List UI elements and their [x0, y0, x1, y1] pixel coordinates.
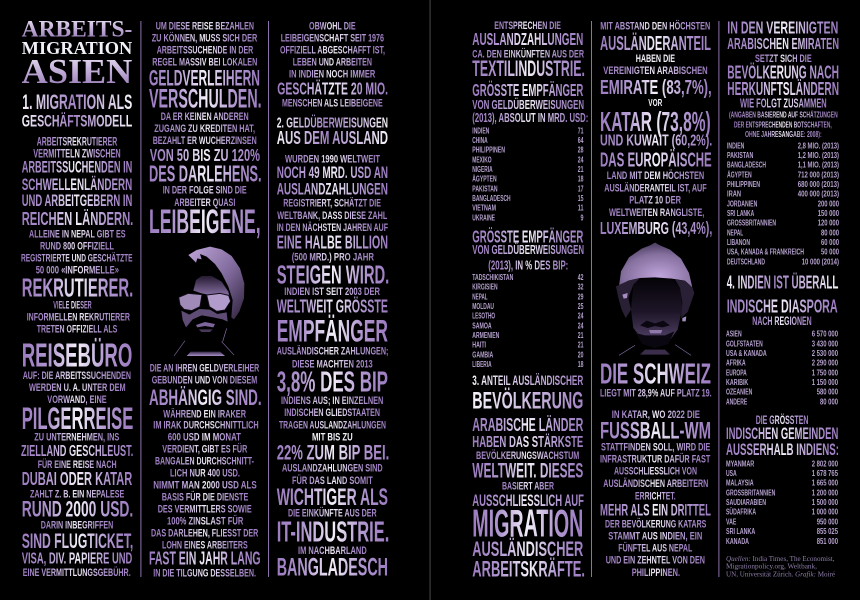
page fold — [429, 0, 431, 600]
table: empfänger in prozent des bip: 25 — [578, 302, 584, 311]
table: empfänger absolut: INDIEN — [472, 126, 489, 135]
text block: abhängig: FAST EIN JAHR LANG — [149, 548, 261, 568]
table: grösste gemeinden: MYANMAR — [726, 459, 754, 468]
table: empfänger absolut: PAKISTAN — [472, 184, 498, 193]
text block: verschulden: ARBEITSSUCHENDE IN DER — [157, 45, 253, 57]
table: empfänger in prozent des bip: VON GELDÜBERWEISUNGEN — [472, 242, 584, 257]
text block: auslandzahlungen: 3,8% DES BIP — [277, 367, 388, 399]
table: empfänger absolut: 24 — [578, 155, 584, 164]
table: emirate nach herkunftsländern: 1,2 MIO. (2013) — [798, 151, 839, 160]
table: emirate nach herkunftsländern: 80 000 — [821, 228, 839, 237]
table: emirate nach herkunftsländern: USA, KANADA & FRANKREICH — [727, 248, 804, 257]
table: emirate nach herkunftsländern: OHNE JAHRESANGABE: 2008): — [745, 130, 822, 139]
text block: reisebüro: ZIELLAND GESCHLEUST. — [21, 443, 133, 460]
table: empfänger in prozent des bip: 20 — [578, 350, 584, 359]
text block: rekrutierer: ARBEITSSUCHENDEN IN — [22, 158, 132, 177]
text block: reisebüro: DUBAI ODER KATAR — [22, 469, 133, 490]
text block: auslandzahlungen: FÜR DAS LAND SOMIT — [292, 474, 373, 487]
table: indische diaspora: USA & KANADA — [726, 349, 767, 358]
table: emirate nach herkunftsländern — [727, 17, 839, 266]
heading: section 2 — [277, 114, 388, 149]
table: grösste gemeinden: 1 500 000 — [812, 498, 838, 507]
text block: ausländeranteil: HABEN DIE — [636, 53, 675, 65]
table: grösste gemeinden: SAUDIARABIEN — [726, 498, 766, 507]
table: empfänger absolut: NIGERIA — [472, 165, 493, 174]
text block: auslandzahlungen: WICHTIGER ALS — [277, 484, 388, 511]
text block: abhängig: DAS DARLEHEN, FLIESST DER — [151, 528, 258, 540]
text block: verschulden: DA ER KEINEN ANDEREN — [161, 111, 249, 123]
table: indische diaspora: 6 570 000 — [812, 330, 838, 339]
text block: arabische länder: MIGRATION — [472, 503, 583, 546]
heading: section 2: 2. GELDÜBERWEISUNGEN — [277, 114, 388, 131]
table: empfänger in prozent des bip — [472, 227, 584, 369]
text block: reisebüro: FÜR EINE REISE NACH — [38, 458, 117, 471]
text block: arabische länder: BASIERT ABER — [502, 480, 554, 492]
table: emirate nach herkunftsländern: 120 000 — [818, 219, 839, 228]
text block: verschulden: VERSCHULDEN. — [149, 84, 262, 114]
text block: rekrutierer: REKRUTIERER. — [22, 272, 133, 302]
text block: arabische länder: ARABISCHE LÄNDER — [472, 414, 583, 435]
text block: ausländeranteil: EMIRATE (83,7%), — [600, 77, 712, 99]
table: empfänger absolut: CHINA — [472, 136, 488, 145]
text block: verschulden: GELDVERLEIHERN — [149, 66, 260, 91]
table: indische diaspora: 2 530 000 — [812, 349, 838, 358]
table: empfänger in prozent des bip: KIRGISIEN — [472, 283, 498, 292]
table: empfänger absolut: 15 — [578, 194, 584, 203]
text block: auslandzahlungen: TRAGEN AUSLANDZAHLUNGEN — [279, 419, 386, 431]
table: emirate nach herkunftsländern: SETZT SICH DIE — [755, 53, 812, 65]
text block: arabische länder: ARBEITSKRÄFTE. — [472, 557, 585, 582]
text block: auslandzahlungen: IM NACHBARLAND — [298, 545, 367, 557]
table: emirate nach herkunftsländern: JORDANIEN — [727, 199, 757, 208]
text block: verschulden: ZUGANG ZU KREDITEN HAT, — [154, 123, 255, 135]
text block: reisebüro: REISEBÜRO — [22, 338, 132, 375]
table: grösste gemeinden: SÜDAFRIKA — [726, 508, 756, 517]
text block: abhängig: DES VERMITTLERS SOWIE — [158, 504, 252, 516]
table: empfänger absolut: 17 — [578, 184, 584, 193]
text block: verschulden: REGEL MASSIV BEI LOKALEN — [152, 57, 257, 69]
table: grösste gemeinden: 1 665 000 — [812, 479, 838, 488]
text block: ausländeranteil: AUSLÄNDERANTEIL IST, AUF — [604, 181, 707, 194]
table: grösste gemeinden: 851 000 — [817, 537, 838, 546]
text block: fussball-wm: STATTFINDEN SOLL, WIRD DIE — [601, 442, 710, 454]
table: empfänger absolut: VON GELDÜBERWEISUNGEN — [472, 97, 584, 112]
text block: abhängig: LOHN EINES ARBEITERS — [162, 540, 248, 552]
table: indische diaspora: OZEANIEN — [726, 388, 752, 397]
text block: verschulden: VON 50 BIS ZU 120% — [150, 145, 260, 165]
text block: arabische länder: HABEN DAS STÄRKSTE — [472, 433, 583, 451]
table: emirate nach herkunftsländern: ÄGYPTEN — [727, 170, 752, 179]
text block: auslandzahlungen: DIESE MACHTEN 2013 — [292, 358, 373, 370]
text block: abhängig — [149, 362, 262, 580]
text block: rekrutierer: REGISTRIERTE UND GESCHÄTZTE — [21, 252, 133, 264]
text block: verschulden: DES DARLEHENS. — [149, 161, 262, 187]
table: empfänger absolut: 18 — [578, 175, 584, 184]
table: grösste gemeinden: 1 678 765 — [812, 469, 838, 478]
text block: reisebüro: INFORMELLEN REKRUTIERER — [27, 312, 130, 324]
text block: auslandzahlungen: 22% ZUM BIP BEI. — [277, 441, 389, 464]
table: indische diaspora: 2 290 000 — [812, 359, 838, 368]
text block: auslandzahlungen: AUSLÄNDISCHER ZAHLUNGEN; — [277, 345, 388, 358]
table: grösste gemeinden: KANADA — [726, 537, 749, 546]
table: empfänger in prozent des bip: 24 — [578, 312, 584, 321]
text block: verschulden: ARBEITER QUASI — [174, 197, 235, 209]
text block: schweiz — [600, 358, 712, 400]
table: indische diaspora: EUROPA — [726, 368, 747, 377]
text block: verschulden: LEIBEIGENE, — [149, 203, 261, 241]
panel: column 6 — [726, 17, 839, 579]
text block: ausländeranteil: MIT ABSTAND DEN HÖCHSTEN — [600, 19, 710, 32]
table: emirate nach herkunftsländern: DEUTSCHLAND — [727, 257, 765, 266]
text block: reisebüro: PILGERREISE — [22, 401, 133, 436]
table: empfänger in prozent des bip: TADSCHIKISTAN — [472, 273, 513, 282]
text block: arabische länder — [472, 414, 585, 582]
panel: column 1 — [21, 17, 133, 579]
table: empfänger in prozent des bip: 42 — [578, 273, 584, 282]
illustration: man with turban and sunglasses — [174, 247, 244, 356]
text block: textilindustrie: TEXTILINDUSTRIE. — [472, 56, 585, 81]
text block: leibeigenschaft: OBWOHL DIE — [309, 20, 356, 32]
text block: reisebüro: RUND 2000 USD. — [22, 497, 133, 522]
text block: arabische länder: BEVÖLKERUNGSWACHSTUM — [476, 449, 579, 462]
text block: reisebüro — [21, 299, 133, 579]
table: grösste gemeinden: GROSSBRITANNIEN — [726, 488, 775, 497]
text block: auslandzahlungen: STEIGEN WIRD. — [277, 259, 389, 289]
text block: auslandzahlungen: (500 MRD.) PRO JAHR — [292, 252, 374, 264]
text block: fussball-wm: FUSSBALL-WM — [600, 417, 711, 444]
panel: column 2 — [149, 20, 262, 580]
table: emirate nach herkunftsländern: 10 000 (2014) — [802, 257, 839, 266]
text block: auslandzahlungen: NOCH 49 MRD. USD AN — [277, 164, 388, 182]
text block: auslandzahlungen: EMPFÄNGER — [277, 314, 388, 349]
table: emirate nach herkunftsländern: LIBANON — [727, 238, 750, 247]
table: empfänger absolut: 11 — [578, 204, 584, 213]
table: empfänger in prozent des bip: 18 — [578, 360, 584, 369]
table: indische diaspora: 580 000 — [817, 388, 838, 397]
source credits: Quellen: India Times, The Economist, — [726, 555, 835, 563]
text block: abhängig: VERDIENT, GIBT ES FÜR — [162, 443, 247, 456]
table: grösste gemeinden: 950 000 — [817, 517, 838, 526]
text block: textilindustrie: ENTSPRECHEN DIE — [494, 20, 561, 32]
table: emirate nach herkunftsländern: INDIEN — [727, 141, 744, 150]
text block: abhängig: ABHÄNGIG SIND. — [149, 385, 262, 410]
text block: verschulden: UM DIESE REISE BEZAHLEN — [156, 20, 254, 32]
table: empfänger absolut: VIETNAM — [472, 204, 496, 213]
column rules — [140, 21, 719, 577]
text block: leibeigenschaft: MENSCHEN ALS LEIBEIGENE — [282, 98, 383, 110]
text block: leibeigenschaft: LEIBEIGENSCHAFT SEIT 1976 — [281, 33, 384, 45]
text block: ausländeranteil: LUXEMBURG (43,4%), — [600, 218, 712, 238]
text block: reisebüro: VISA, DIV. PAPIERE UND — [22, 551, 132, 568]
table: emirate nach herkunftsländern: PHILIPPINEN — [727, 180, 760, 189]
table: empfänger absolut: GRÖSSTE EMPFÄNGER — [472, 80, 584, 100]
table: emirate nach herkunftsländern: 1,1 MIO. (2013) — [798, 161, 839, 170]
table: emirate nach herkunftsländern: NEPAL — [727, 228, 743, 237]
table: grösste gemeinden: DIE GRÖSSTEN — [756, 414, 808, 427]
text block: verschulden: BEZAHLT ER WUCHERZINSEN — [153, 135, 257, 147]
text block: abhängig: DIE AN IHREN GELDVERLEIHER — [150, 362, 259, 374]
text block: reisebüro: ZAHLT Z. B. EIN NEPALESE — [30, 489, 124, 501]
panel: column 4 — [472, 20, 588, 582]
text block: fussball-wm: MEHR ALS EIN DRITTEL — [600, 501, 711, 519]
table: empfänger absolut — [472, 80, 588, 222]
illustration: worker with hard hat — [616, 243, 694, 355]
table: empfänger in prozent des bip: LESOTHO — [472, 312, 495, 321]
text block: fussball-wm: FÜNFTEL AUS NEPAL — [618, 541, 692, 554]
title: MIGRATION — [22, 38, 132, 58]
title: ARBEITS- — [22, 17, 132, 42]
text block: reisebüro: AUF: DIE ARBEITSSUCHENDEN — [23, 370, 131, 382]
text block: verschulden — [149, 20, 262, 241]
source credits — [726, 555, 835, 578]
table: indische diaspora: AFRIKA — [726, 359, 746, 368]
table: emirate nach herkunftsländern: GROSSBRITANNIEN — [727, 219, 776, 228]
table: empfänger absolut: 28 — [578, 146, 584, 155]
text block: fussball-wm: STAMMT AUS INDIEN, EIN — [608, 530, 702, 542]
text block: reisebüro: WERDEN U. A. UNTER DEM — [29, 382, 126, 394]
heading: section 2: AUS DEM AUSLAND — [277, 128, 388, 149]
text block: ausländeranteil: KATAR (73,8%) — [600, 106, 711, 137]
text block: ausländeranteil: AUSLÄNDERANTEIL — [600, 32, 711, 55]
table: empfänger absolut: PHILIPPINEN — [472, 146, 505, 155]
text block: reisebüro: SIND FLUGTICKET, — [22, 530, 133, 553]
heading: section 1: GESCHÄFTSMODELL — [22, 112, 132, 131]
table: empfänger in prozent des bip: (2013), IN % DES BIP: — [488, 257, 568, 272]
table: empfänger in prozent des bip: 21 — [578, 341, 584, 350]
table: empfänger in prozent des bip: 21 — [578, 331, 584, 340]
text block: abhängig: BANGALEN DURCHSCHNITT- — [155, 456, 254, 468]
text block: ausländeranteil: PLATZ 10 DER — [629, 194, 681, 206]
table: empfänger in prozent des bip: 29 — [578, 292, 584, 301]
text block: schweiz: LIEGT MIT 28,9% AUF PLATZ 19. — [600, 388, 712, 400]
text block: auslandzahlungen: REGISTRIERT, SCHÄTZT DIE — [283, 197, 381, 210]
text block: arabische länder: WELTWEIT. DIESES — [472, 460, 583, 483]
table: emirate nach herkunftsländern: PAKISTAN — [727, 151, 753, 160]
text block: schweiz: DIE SCHWEIZ — [600, 358, 711, 390]
table: emirate nach herkunftsländern: 400 000 (2013) — [798, 190, 839, 199]
table: emirate nach herkunftsländern: 200 000 — [818, 199, 839, 208]
text block: abhängig: NIMMT MAN 2000 USD ALS — [153, 480, 257, 492]
text block: ausländeranteil: LAND MIT DEM HÖCHSTEN — [607, 169, 704, 182]
table: empfänger in prozent des bip: NEPAL — [472, 292, 488, 301]
text block: reisebüro: TRETEN OFFIZIELL ALS — [37, 324, 117, 336]
text block: rekrutierer: ALLEINE IN NEPAL GIBT ES — [29, 228, 126, 240]
text block: fussball-wm: UND EIN ZEHNTEL VON DEN — [606, 555, 705, 567]
table: empfänger absolut: BANGLADESCH — [472, 194, 511, 203]
source credits: UN, Universität Zürich. Grafik: Moiré — [726, 570, 835, 578]
panel: column 5 — [600, 19, 712, 579]
table: indische diaspora: ANDERE — [726, 398, 748, 407]
text block: fussball-wm: AUSLÄNDISCHEN ARBEITERN — [603, 477, 708, 490]
text block: fussball-wm: INFRASTRUKTUR DAFÜR FAST — [600, 453, 710, 466]
text block: fussball-wm — [600, 409, 711, 579]
text block: ausländeranteil: VOR — [648, 97, 663, 109]
text block: rekrutierer: ARBEITSREKRUTIERER — [37, 136, 118, 149]
text block: textilindustrie: AUSLANDZAHLUNGEN — [472, 29, 583, 49]
text block: fussball-wm: PHILIPPINEN. — [632, 567, 680, 579]
table: empfänger in prozent des bip: MOLDAU — [472, 302, 494, 311]
heading: section 1 — [22, 90, 132, 131]
text block: abhängig: 600 USD IM MONAT — [168, 432, 241, 444]
table: grösste gemeinden: MALAYSIA — [726, 479, 754, 488]
text block: leibeigenschaft: GESCHÄTZTE 20 MIO. — [277, 78, 388, 98]
table: grösste gemeinden — [726, 414, 839, 546]
text block: fussball-wm: ERRICHTET. — [635, 490, 676, 502]
heading: section 3: 3. ANTEIL AUSLÄNDISCHER — [472, 372, 583, 388]
table: empfänger absolut: UKRAINE — [472, 214, 495, 222]
text block: textilindustrie: CA. DEN EINKÜNFTEN AUS DER — [472, 47, 584, 60]
text block: ausländeranteil: DAS EUROPÄISCHE — [600, 149, 712, 172]
text block: auslandzahlungen: INDIEN IST SEIT 2003 DER — [284, 286, 380, 298]
text block: verschulden: IN DER FOLGE SIND DIE — [163, 185, 247, 197]
table: grösste gemeinden: VAE — [726, 517, 737, 526]
table: emirate nach herkunftsländern: BANGLADESCH — [727, 161, 766, 170]
text block: auslandzahlungen: INDISCHEN GLIEDSTAATEN — [284, 407, 380, 419]
text block: reisebüro: VIELE DIESER — [53, 299, 92, 311]
text block: arabische länder: AUSSCHLIESSLICH AUF — [472, 491, 584, 510]
table: empfänger in prozent des bip: 32 — [578, 283, 584, 292]
text block: auslandzahlungen: WURDEN 1990 WELTWEIT — [285, 154, 380, 166]
table: emirate nach herkunftsländern: 50 000 — [821, 248, 839, 257]
table: indische diaspora: 80 000 — [820, 398, 838, 407]
text block: auslandzahlungen: WELTWEIT GRÖSSTE — [277, 297, 388, 317]
text block: auslandzahlungen: IT-INDUSTRIE. — [277, 517, 389, 549]
text block: ausländeranteil: VEREINIGTEN ARABISCHEN — [603, 65, 708, 77]
text block: rekrutierer: REICHEN LÄNDERN. — [22, 209, 133, 230]
table: emirate nach herkunftsländern: 60 000 — [821, 238, 839, 247]
table: emirate nach herkunftsländern: SRI LANKA — [727, 209, 754, 218]
heading: section 3 — [472, 372, 583, 414]
text block: rekrutierer — [21, 136, 133, 302]
table: indische diaspora: 1 150 000 — [812, 378, 838, 387]
table: empfänger absolut: 21 — [578, 165, 584, 174]
table: empfänger absolut: 71 — [578, 126, 584, 135]
text block: auslandzahlungen: EINE HALBE BILLION — [277, 233, 388, 254]
text block: auslandzahlungen: DIE EINKÜNFTE AUS DER — [288, 507, 377, 520]
table: indische diaspora: NACH REGIONEN — [752, 315, 812, 328]
text block: abhängig: IM IRAK DURCHSCHNITTLICH — [153, 420, 259, 432]
text block: abhängig: BASIS FÜR DIE DIENSTE — [162, 491, 248, 504]
table: empfänger in prozent des bip: ARMENIEN — [472, 331, 499, 340]
text block: auslandzahlungen: AUSLANDZAHLUNGEN SIND — [282, 462, 383, 474]
text block: reisebüro: DARIN INBEGRIFFEN — [41, 520, 113, 532]
table: emirate nach herkunftsländern: 2,8 MIO. (2013) — [798, 141, 839, 150]
table: grösste gemeinden: 2 802 000 — [812, 459, 838, 468]
text block: rekrutierer: UND ARBEITGEBERN IN — [22, 191, 132, 210]
text block: leibeigenschaft: IN INDIEN NOCH IMMER — [289, 68, 375, 80]
table: grösste gemeinden: 855 025 — [817, 527, 838, 536]
text block: leibeigenschaft — [277, 20, 388, 110]
table: empfänger absolut: 9 — [580, 214, 584, 222]
table: empfänger in prozent des bip: SAMOA — [472, 321, 492, 330]
title: ASIEN — [22, 52, 132, 91]
text block: auslandzahlungen: WELTBANK, DASS DIESE ZAHL — [277, 210, 387, 222]
text block: abhängig: GEBUNDEN UND VON DIESEM — [152, 374, 257, 386]
table: indische diaspora: 3 430 000 — [812, 339, 838, 348]
table: empfänger in prozent des bip: LIBERIA — [472, 360, 492, 369]
text block: leibeigenschaft: LEBEN UND ARBEITEN — [293, 57, 372, 69]
table: indische diaspora: KARIBIK — [726, 378, 748, 387]
text block: ausländeranteil — [600, 19, 712, 238]
text block: fussball-wm: IN KATAR, WO 2022 DIE — [612, 409, 700, 421]
heading: section 3: BEVÖLKERUNG — [472, 387, 583, 414]
table: emirate nach herkunftsländern: 712 000 (2013) — [798, 170, 839, 179]
text block: arabische länder: AUSLÄNDISCHER — [472, 538, 583, 561]
heading: section 1: 1. MIGRATION ALS — [22, 90, 132, 114]
table: grösste gemeinden: USA — [726, 469, 737, 478]
table: indische diaspora: ASIEN — [726, 330, 742, 339]
table: empfänger absolut: (2013), ABSOLUT IN MRD. USD: — [472, 110, 588, 125]
text block: auslandzahlungen: IN DEN NÄCHSTEN JAHREN AUF — [277, 221, 388, 234]
table: emirate nach herkunftsländern: 150 000 — [818, 209, 839, 218]
text block: abhängig: IN DIE TILGUNG DESSELBEN. — [153, 568, 256, 580]
table: emirate nach herkunftsländern: 680 000 (2013) — [798, 180, 839, 189]
text block: reisebüro: VORWAND, EINE — [47, 394, 107, 406]
table: empfänger in prozent des bip: GRÖSSTE EMPFÄNGER — [472, 227, 584, 247]
text block: rekrutierer: RUND 800 OFFIZIELL — [40, 240, 114, 252]
table: empfänger absolut: 64 — [578, 136, 584, 145]
table: empfänger in prozent des bip: 24 — [578, 321, 584, 330]
table: grösste gemeinden: 1 000 000 — [812, 508, 838, 517]
text block: auslandzahlungen: BANGLADESCH — [277, 555, 388, 582]
text block: auslandzahlungen — [277, 154, 389, 582]
table: grösste gemeinden: 1 200 000 — [812, 488, 838, 497]
text block: rekrutierer: SCHWELLENLÄNDERN — [22, 175, 132, 194]
text block: textilindustrie — [472, 20, 585, 81]
text block: reisebüro: ZU UNTERNEHMEN, INS — [34, 431, 119, 443]
text block: ausländeranteil: WELTWEITEN RANGLISTE, — [609, 207, 704, 219]
text block: auslandzahlungen: MIT BIS ZU — [312, 431, 353, 443]
text block: leibeigenschaft: OFFIZIELL ABGESCHAFFT IST, — [280, 45, 385, 57]
table: empfänger in prozent des bip: GAMBIA — [472, 350, 493, 359]
source credits: Migrationpolicy.org, Weltbank, — [726, 563, 817, 571]
panel: column 3 — [277, 20, 389, 582]
table: indische diaspora: 1 750 000 — [812, 368, 838, 377]
table: empfänger in prozent des bip: HAITI — [472, 341, 486, 350]
text block: auslandzahlungen: AUSLANDZAHLUNGEN — [277, 179, 388, 198]
text block: fussball-wm: AUSSCHLIESSLICH VON — [614, 466, 697, 478]
text block: abhängig: 100% ZINSLAST FÜR — [167, 515, 243, 528]
table: empfänger absolut: MEXIKO — [472, 155, 492, 164]
table: indische diaspora — [726, 296, 838, 407]
text block: reisebüro: EINE VERMITTLUNGSGEBÜHR. — [23, 566, 131, 579]
text block: abhängig: LICH NUR 400 USD. — [170, 468, 240, 480]
text block: verschulden: ZU KÖNNEN, MUSS SICH DER — [152, 32, 257, 45]
text block: fussball-wm: DER BEVÖLKERUNG KATARS — [605, 517, 706, 530]
text block: ausländeranteil: UND KUWAIT (60,2%). — [600, 133, 712, 150]
text block: rekrutierer: VERMITTELN ZWISCHEN — [33, 148, 121, 161]
table: grösste gemeinden: SRI LANKA — [726, 527, 755, 536]
table: emirate nach herkunftsländern: IRAN — [727, 190, 741, 199]
table: empfänger absolut: ÄGYPTEN — [472, 175, 497, 184]
text block: abhängig: WÄHREND EIN IRAKER — [163, 407, 246, 420]
table: indische diaspora: GOLFSTAATEN — [726, 339, 763, 348]
text block: auslandzahlungen: INDIENS AUS; IN EINZELNEN — [281, 395, 383, 407]
text block: rekrutierer: 50 000 «INFORMELLE» — [36, 264, 119, 276]
title — [22, 17, 132, 91]
